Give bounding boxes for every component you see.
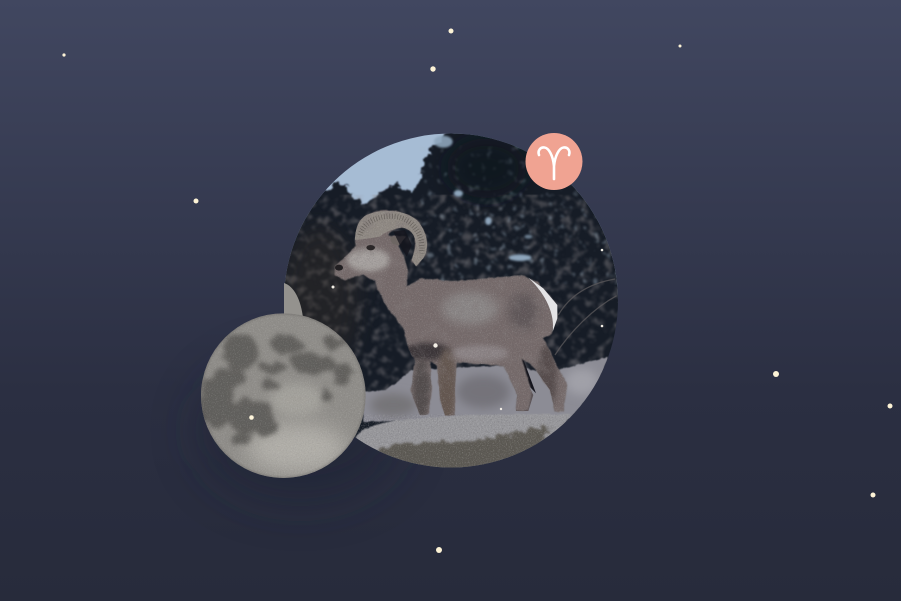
grass stems: [555, 279, 617, 355]
foreground rock: [347, 414, 570, 470]
ram shading: [334, 210, 566, 416]
sky: [284, 133, 618, 303]
ram body: [334, 210, 567, 416]
moon: [201, 313, 366, 478]
horn ridges: [360, 216, 422, 253]
lunar maria: [201, 334, 352, 444]
lunar highlands: [247, 423, 347, 473]
circular ram photo: [285, 134, 618, 468]
limb darkening: [201, 313, 366, 478]
sky gaps: [434, 136, 532, 261]
zodiac badge: Aries: [526, 133, 582, 190]
far hind leg: [514, 388, 534, 411]
sparkles over photo: [332, 249, 603, 410]
icon: Aries glyph: [539, 147, 569, 179]
tree mass: [285, 134, 618, 468]
star on moon: [249, 415, 254, 420]
small rock behind moon: [284, 283, 303, 318]
ram details: [528, 278, 557, 332]
back rock: [363, 357, 608, 422]
moon drop shadow: [200, 360, 400, 500]
